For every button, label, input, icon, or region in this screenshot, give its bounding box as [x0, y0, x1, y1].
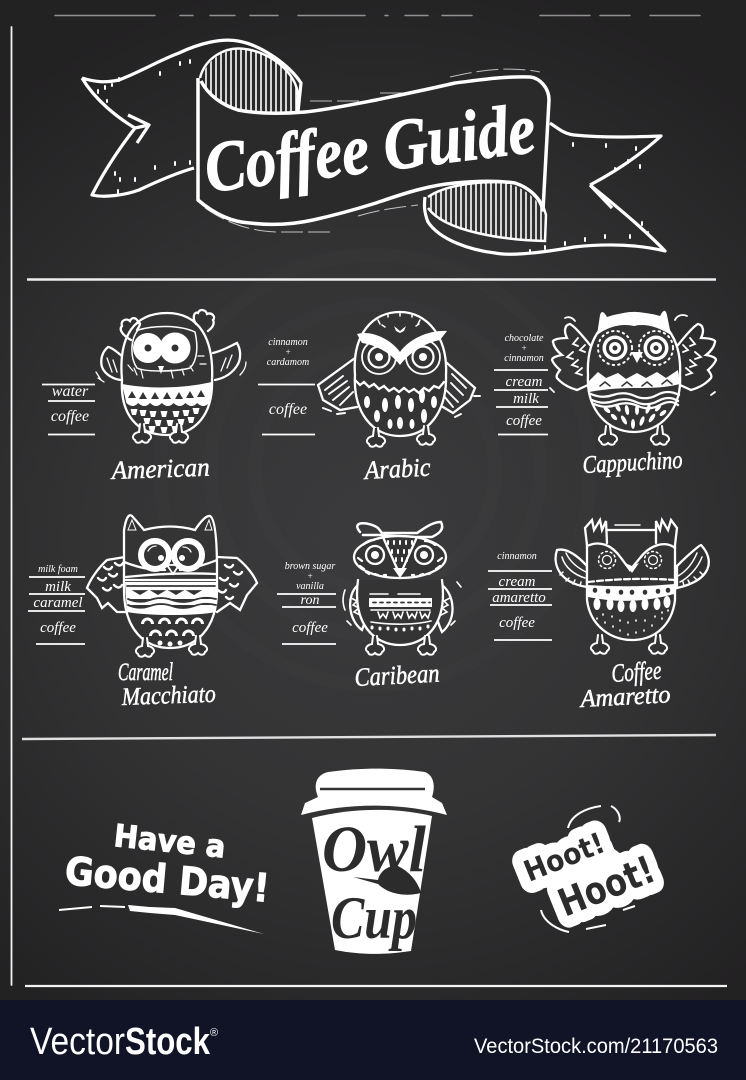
ingredient chart: Cappuchino	[494, 333, 548, 434]
sticker: Hoot Hoot: Hoot!	[552, 847, 661, 925]
divider top	[27, 278, 716, 281]
ingredient chart: Cappuchino: milk	[513, 391, 539, 407]
ingredient chart: Coffee Amaretto: cinnamon	[497, 551, 537, 562]
ingredient chart: Cappuchino: chocolate	[505, 333, 544, 344]
coffee cup	[301, 769, 447, 954]
label: Caramel Macchiato	[118, 659, 216, 711]
slogan: Have a Good Day: Good Day!	[63, 849, 271, 912]
cup text: Cup: Cup	[331, 885, 417, 951]
ingredient chart: Caramel Macchiato: caramel	[33, 595, 83, 611]
ingredient chart: Coffee Amaretto: amaretto	[492, 590, 546, 606]
right ribbon tail	[424, 123, 665, 254]
left ribbon tail	[82, 40, 301, 196]
label: Cappuchino: Cappuchino	[582, 447, 683, 479]
ingredient chart: Caribean: brown sugar	[285, 561, 335, 572]
label: Arabic: Arabic	[362, 453, 432, 485]
ingredient chart: Coffee Amaretto: cream	[499, 574, 536, 590]
ingredient chart: Arabic: cardamom	[267, 357, 309, 368]
chalk underline	[59, 905, 264, 934]
owl: Arabic	[318, 312, 480, 447]
ingredient chart: American	[42, 383, 95, 434]
icon: feather	[353, 866, 421, 895]
ingredient chart: Caribean: +	[307, 571, 313, 581]
ingredient chart: American: coffee	[51, 408, 89, 425]
label: Coffee Amaretto: Amaretto	[578, 681, 671, 713]
owl: American	[96, 310, 246, 443]
label: Coffee Amaretto	[578, 656, 671, 713]
watermark logo	[30, 1021, 218, 1063]
ingredient chart: Coffee Amaretto: coffee	[499, 615, 535, 631]
divider middle (decorative)	[22, 735, 716, 739]
ingredient chart: Caramel Macchiato: milk foam	[38, 564, 78, 575]
chalk highlight dashes	[205, 69, 540, 232]
upper fold hatching	[205, 50, 297, 112]
owl: Caramel Macchiato	[87, 515, 257, 657]
cup lid	[301, 769, 447, 815]
sticker: Hoot Hoot: Hoot!	[552, 847, 661, 925]
ingredient chart: Caribean	[277, 561, 336, 644]
ingredient chart: Arabic: cinnamon	[268, 337, 308, 348]
lower fold hatching	[430, 183, 542, 240]
label: American: American	[109, 453, 210, 485]
ingredient chart: Caramel Macchiato: milk	[45, 579, 71, 595]
owl: Coffee Amaretto	[556, 520, 709, 654]
ingredient chart: Cappuchino: cream	[506, 374, 543, 390]
cup body	[312, 810, 432, 954]
stitch dots	[98, 60, 648, 252]
label: Caramel Macchiato: Caramel	[118, 659, 173, 686]
title: Coffee Guide: Coffee Guide	[200, 88, 539, 208]
sticker: Hoot Hoot: Hoot!	[519, 825, 610, 888]
slogan: Have a Good Day: Have a	[112, 818, 227, 866]
watermark url: VectorStock.com/21170563	[474, 1035, 718, 1058]
label: Caramel Macchiato: Macchiato	[120, 681, 216, 711]
ingredient chart: Cappuchino: cinnamon	[504, 353, 544, 364]
label: Coffee Amaretto: Coffee	[610, 656, 662, 688]
ingredient chart: Arabic: coffee	[269, 401, 307, 418]
slogan: Have a Good Day	[63, 818, 271, 912]
ribbon banner	[82, 40, 665, 254]
divider bottom	[25, 985, 727, 987]
label: Caribean: Caribean	[354, 659, 440, 692]
owl: Cappuchino	[550, 311, 716, 445]
ingredient chart: American: water	[52, 383, 89, 400]
main ribbon band	[198, 77, 549, 224]
ingredient chart: Cappuchino: coffee	[506, 413, 542, 429]
sticker: Hoot Hoot	[519, 806, 661, 932]
footer strip	[0, 1000, 746, 1080]
ingredient chart: Caramel Macchiato: coffee	[40, 620, 76, 636]
cup text: Owl: Owl	[322, 813, 427, 886]
watermark logo: Vector	[30, 1021, 125, 1063]
sticker: Hoot Hoot: Hoot!	[519, 825, 610, 888]
ingredient chart: Coffee Amaretto	[488, 551, 552, 640]
ingredient chart: Arabic: +	[285, 347, 291, 357]
ingredient chart: Arabic	[258, 337, 315, 434]
watermark logo: ®	[210, 1027, 218, 1039]
watermark logo: Stock	[125, 1021, 211, 1063]
ingredient chart: Caramel Macchiato	[28, 564, 85, 644]
owl: Caribean	[343, 522, 461, 655]
ingredient chart: Caribean: coffee	[292, 620, 328, 636]
ingredient chart: Caribean: vanilla	[296, 581, 324, 592]
coffee stain rings	[160, 255, 590, 685]
ingredient chart: Caribean: ron	[301, 593, 319, 608]
ingredient chart: Cappuchino: +	[521, 343, 527, 353]
